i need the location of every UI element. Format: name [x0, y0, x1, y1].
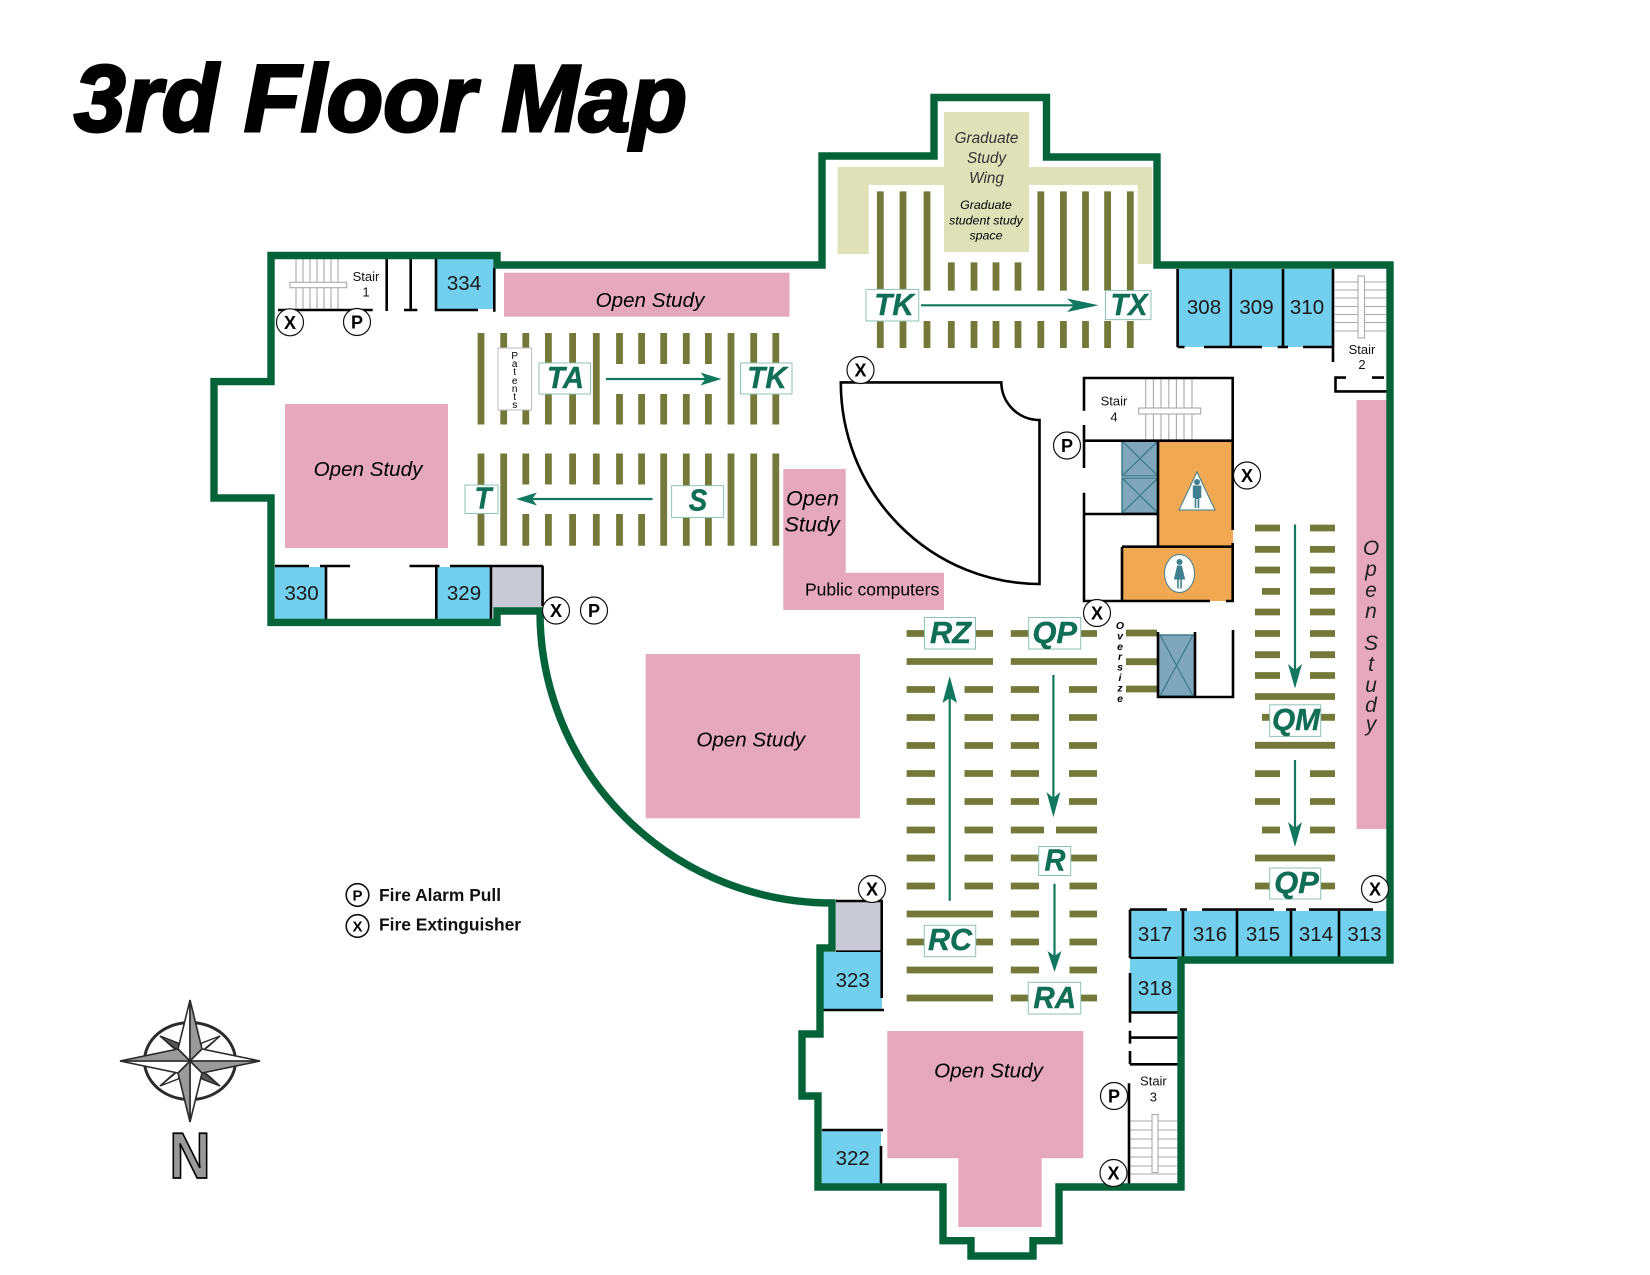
marker: extinguisher east	[1362, 876, 1388, 902]
building outer wall	[214, 98, 1390, 1256]
rooms 313 to 317	[1130, 910, 1387, 958]
label: Patents: t	[513, 392, 516, 403]
grey utility room south	[836, 901, 882, 952]
legend: fire alarm pull: P	[352, 888, 363, 904]
legend: fire extinguisher: Fire Extinguisher	[379, 914, 521, 934]
stair 2	[1334, 276, 1387, 391]
arrow: R to RA	[1048, 884, 1062, 972]
title: 3rd Floor Map	[74, 46, 687, 152]
call number label: QM: QM	[1272, 703, 1321, 737]
elevator 3 and closet	[1158, 630, 1233, 697]
arrow: QP to R	[1046, 675, 1060, 817]
rooms 313 to 317: 313	[1347, 923, 1382, 946]
core walls	[1084, 378, 1233, 601]
arrow: TA to TK	[606, 372, 722, 386]
compass north letter: N	[170, 1119, 210, 1192]
arrow: S to T	[516, 492, 653, 506]
rooms 308 309 310: 310	[1290, 296, 1324, 319]
label: Oversize: e	[1117, 641, 1123, 653]
graduate study wing area: Graduate	[960, 198, 1012, 212]
label: Patents: a	[512, 359, 518, 370]
room 318: 318	[1138, 977, 1172, 1000]
legend	[346, 884, 521, 937]
panel: open study and public computers: Public computers	[805, 580, 939, 600]
call number label: T: T	[474, 482, 494, 516]
marker: pull stair 4: P	[1061, 436, 1073, 456]
rooms 308 309 310: 309	[1239, 296, 1274, 319]
elevator 2	[1122, 478, 1158, 513]
room 329: 329	[447, 582, 481, 605]
shelves: TA to TK	[481, 333, 776, 424]
stair 4 steps	[1139, 378, 1201, 441]
call number label: S	[672, 484, 724, 518]
label: Patents	[498, 348, 532, 411]
panel: open study south	[887, 1031, 1083, 1227]
call number label: TX: TX	[1110, 288, 1149, 322]
panel: open study east vertical: p	[1364, 558, 1377, 581]
icon: women's restroom	[1164, 554, 1194, 592]
panel: open study east vertical: d	[1365, 694, 1378, 717]
stair 1: 1	[362, 285, 370, 300]
call number label: TK north: TK	[874, 288, 916, 322]
panel: open study east vertical: n	[1365, 600, 1377, 623]
room 330: 330	[284, 582, 319, 605]
marker: pull west	[580, 597, 608, 624]
grey utility room north	[491, 566, 543, 608]
stair 3	[1129, 1073, 1177, 1185]
room 318	[1130, 959, 1178, 1012]
panel: open study east vertical: u	[1365, 674, 1377, 697]
shelves: QP to RA	[1011, 634, 1097, 998]
core: stair 4, elevators, restrooms	[1084, 378, 1233, 601]
call number label: T	[465, 482, 498, 516]
rooms 313 to 317: 317	[1138, 923, 1172, 946]
call number label: R	[1039, 844, 1071, 878]
marker: extinguisher restroom	[1234, 462, 1260, 489]
graduate study wing area: Graduate	[955, 130, 1018, 147]
panel: open study top	[504, 273, 790, 317]
shelves: RC to RZ	[907, 634, 993, 998]
graduate study wing area: Wing	[969, 170, 1004, 187]
marker: extinguisher curved room: X	[854, 360, 867, 380]
panel: open study and public computers	[783, 469, 944, 610]
marker: extinguisher west: X	[550, 601, 562, 621]
arrow: RC to RZ	[942, 676, 957, 901]
marker: extinguisher restroom: X	[1241, 466, 1253, 486]
closets and doors north	[387, 259, 417, 311]
label: Patents: n	[512, 384, 517, 395]
marker: extinguisher stair 3	[1100, 1160, 1127, 1186]
arrow: QM upper	[1288, 524, 1302, 689]
panel: open study centre	[646, 654, 860, 818]
label: Oversize: v	[1117, 630, 1124, 642]
rooms 308 309 310	[1178, 269, 1333, 362]
marker: pull west: P	[588, 601, 600, 621]
closets below room 318	[1130, 1012, 1178, 1064]
panel: open study east vertical: y	[1364, 713, 1378, 736]
rooms 313 to 317: 314	[1299, 923, 1333, 946]
marker: extinguisher west	[542, 597, 570, 624]
label: Patents: e	[512, 376, 518, 387]
stair 1	[278, 259, 380, 310]
graduate study wing area: space	[969, 228, 1003, 242]
panel: open study south: Open Study	[934, 1060, 1045, 1082]
call number label: QP east: QP	[1274, 866, 1320, 900]
label: Oversize	[1116, 620, 1124, 705]
legend: fire extinguisher: X	[352, 918, 363, 936]
label: Oversize: i	[1119, 672, 1123, 684]
marker: pull stair 1: P	[351, 312, 363, 332]
marker: extinguisher east: X	[1369, 880, 1381, 900]
marker: extinguisher core: X	[1091, 604, 1103, 624]
restroom: women orange room	[1122, 547, 1233, 601]
panel: open study east vertical: S	[1364, 632, 1378, 655]
legend: fire alarm pull: Fire Alarm Pull	[379, 885, 501, 905]
icon: men's restroom	[1179, 472, 1215, 510]
marker: extinguisher stair 3: X	[1107, 1164, 1120, 1184]
label: Patents: P	[511, 351, 518, 362]
marker: pull stair 4	[1054, 432, 1080, 459]
label: Patents: t	[513, 367, 516, 378]
panel: open study west	[285, 404, 448, 548]
marker: extinguisher stair 1	[276, 309, 304, 336]
panel: open study top: Open Study	[596, 289, 706, 312]
call number label: QP centre: QP	[1032, 616, 1078, 650]
call number label: R: R	[1044, 844, 1066, 878]
panel: open study and public computers: Study	[784, 512, 841, 537]
panel: open study centre: Open Study	[696, 729, 807, 752]
restroom: men orange room	[1158, 441, 1233, 547]
rooms 308 309 310: 308	[1187, 296, 1221, 319]
arrow: QM to QP	[1288, 760, 1302, 847]
graduate study wing area: student study	[949, 214, 1024, 228]
label: Oversize: z	[1116, 682, 1123, 694]
stair 4 text	[1101, 394, 1128, 425]
call number label: RC: RC	[928, 923, 973, 957]
call number label: TK west: TK	[747, 361, 789, 395]
room 323	[823, 952, 884, 1010]
call number label: RA: RA	[1033, 981, 1076, 1015]
marker: pull stair 3: P	[1108, 1086, 1120, 1106]
arrow: TK to TX	[921, 298, 1099, 312]
panel: open study west: Open Study	[314, 458, 424, 481]
graduate study wing area	[838, 112, 1152, 264]
label: Oversize: O	[1116, 620, 1124, 632]
stair 4 text: 4	[1110, 410, 1118, 425]
elevator 1	[1122, 441, 1158, 476]
legend: fire alarm pull	[346, 884, 501, 906]
marker: extinguisher core	[1084, 600, 1110, 626]
compass rose	[120, 1000, 260, 1122]
marker: pull stair 3	[1100, 1082, 1128, 1110]
shelves: TK to TX	[880, 191, 1130, 348]
marker: pull stair 1	[344, 308, 370, 336]
label: Oversize: e	[1117, 693, 1123, 705]
shelves: QM to QP	[1255, 528, 1335, 886]
shelves: oversize	[1126, 633, 1157, 689]
marker: extinguisher south room	[858, 876, 886, 902]
call number label: S: S	[689, 484, 708, 518]
rooms 313 to 317: 316	[1193, 923, 1227, 946]
shelves: S to T	[481, 454, 776, 546]
label: Oversize: s	[1117, 662, 1123, 674]
room 334	[435, 259, 494, 312]
marker: extinguisher stair 1: X	[284, 313, 296, 333]
panel: open study east vertical: e	[1365, 579, 1377, 602]
room 334: 334	[447, 272, 481, 295]
panel: open study east vertical	[1357, 400, 1387, 829]
panel: open study east vertical: t	[1368, 653, 1375, 676]
marker: extinguisher curved room	[847, 356, 874, 384]
room 329	[410, 566, 491, 620]
stair 1: Stair	[353, 269, 380, 284]
call number label: RZ: RZ	[930, 616, 972, 650]
marker: extinguisher south room: X	[866, 880, 878, 900]
label: Patents: s	[512, 400, 517, 411]
rooms 313 to 317: 315	[1246, 923, 1280, 946]
room 323: 323	[836, 969, 870, 992]
stair 4 text: Stair	[1101, 394, 1128, 409]
stair 3: Stair	[1140, 1073, 1167, 1088]
stair 2: 2	[1358, 357, 1366, 372]
room 322: 322	[836, 1147, 870, 1170]
stair 2: Stair	[1349, 342, 1376, 357]
panel: open study and public computers: Open	[786, 486, 839, 511]
graduate study wing area: Study	[967, 150, 1007, 167]
panel: open study east vertical: O	[1363, 537, 1379, 560]
curved room	[841, 382, 1040, 584]
room 322	[822, 1130, 883, 1184]
label: Oversize: r	[1118, 651, 1123, 663]
room 330	[275, 566, 350, 620]
call number label: TA: TA	[547, 361, 584, 395]
stair 3: 3	[1150, 1090, 1157, 1104]
